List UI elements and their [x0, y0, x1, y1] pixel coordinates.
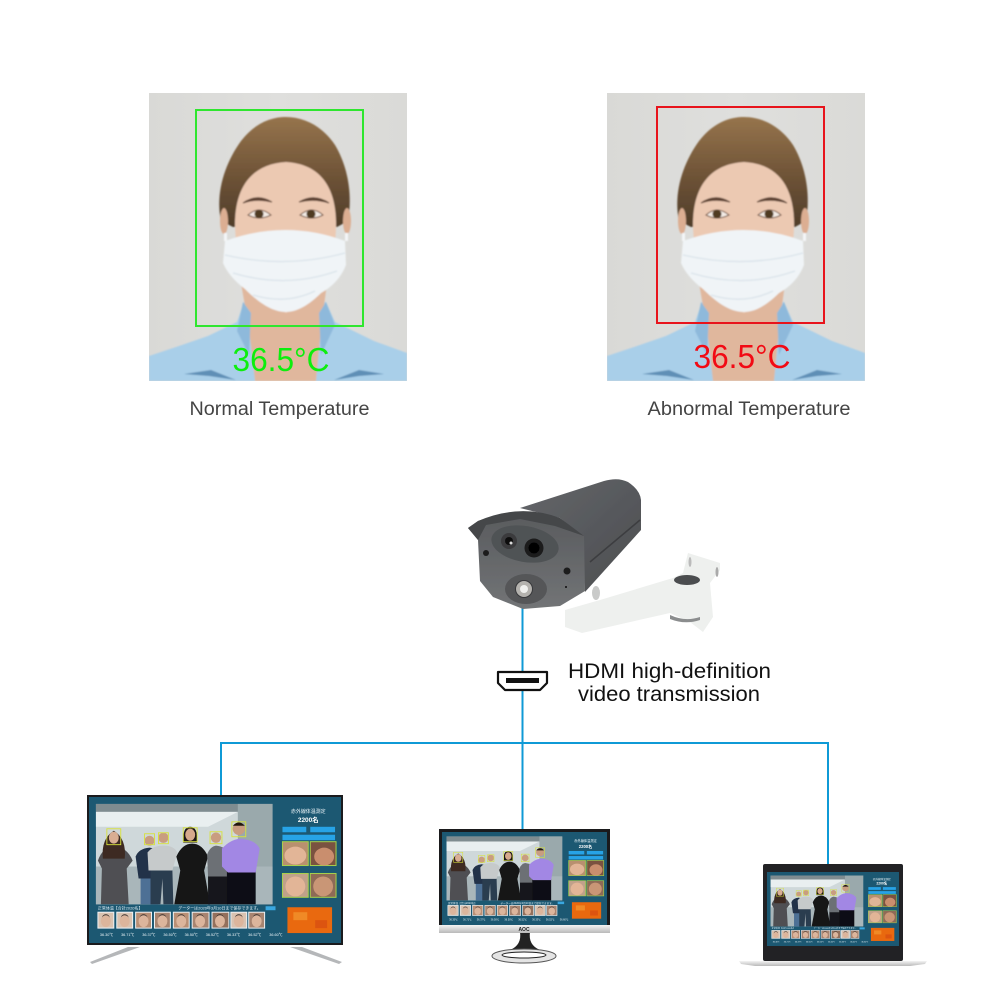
monitor screen [442, 832, 607, 925]
red face detection box [657, 107, 824, 323]
green face detection box [196, 110, 363, 326]
icon: wall mount bracket [565, 553, 720, 633]
icon: thermal camera [468, 479, 641, 609]
camera housing [520, 479, 641, 592]
TV screen [89, 797, 341, 943]
label: HDMI transmission: HDMI high-definition [568, 660, 771, 683]
caption: abnormal temperature: Abnormal Temperature [648, 399, 850, 420]
camera front face [468, 513, 585, 609]
photo panel: abnormal temperature [607, 93, 865, 381]
label: HDMI transmission: video transmission [578, 683, 760, 706]
laptop lid [763, 864, 903, 961]
monitor brand: AOC [518, 927, 530, 933]
TV frame [87, 795, 343, 945]
device: laptop [739, 864, 927, 966]
dual lens housing [488, 520, 562, 568]
monitor stand [510, 932, 540, 950]
thermal lens [505, 574, 547, 604]
abnormal temperature reading: 36.5°C [694, 338, 790, 375]
photo: woman wearing face mask [149, 93, 407, 381]
photo: woman wearing face mask [607, 93, 865, 381]
TV stand [90, 947, 342, 964]
monitor frame [439, 829, 610, 932]
lenses [501, 533, 517, 549]
laptop screen [767, 872, 899, 946]
normal temperature reading: 36.5°C [232, 341, 330, 378]
device: television [87, 795, 343, 964]
laptop base [739, 961, 927, 966]
caption: normal temperature: Normal Temperature [190, 399, 370, 420]
connection lines [221, 608, 828, 864]
icon: HDMI connector [498, 672, 547, 690]
photo panel: normal temperature [149, 93, 407, 381]
device: desktop monitor [439, 829, 610, 963]
